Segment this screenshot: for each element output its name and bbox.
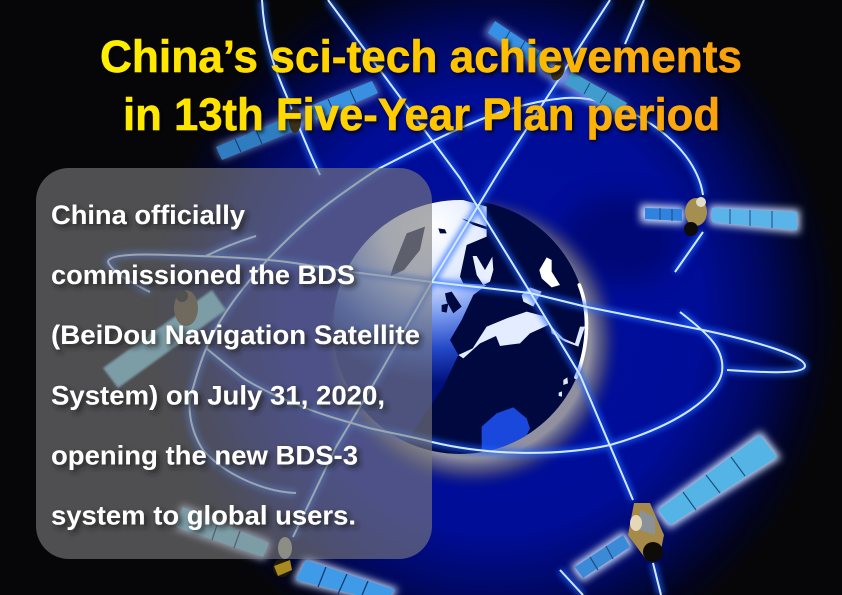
body text <box>51 200 420 530</box>
body line 1: China officially <box>51 200 245 230</box>
satellite body <box>278 537 292 559</box>
body line 3: (BeiDou Navigation Satellite <box>51 320 420 350</box>
satellite body <box>628 503 664 558</box>
satellite: top centre <box>484 20 627 118</box>
globe land and lit ocean <box>333 200 588 452</box>
solar wings glow <box>643 207 797 230</box>
satellite body <box>548 59 568 83</box>
solar wings <box>296 560 395 595</box>
solar wings <box>658 435 777 525</box>
lit ocean <box>333 200 487 442</box>
solar wings <box>488 21 553 72</box>
title line 2: in 13th Five-Year Plan period <box>123 89 720 140</box>
satellite: left, behind panel <box>103 290 226 388</box>
bottom blue sea <box>482 407 530 452</box>
solar wings glow <box>575 435 777 578</box>
greenland shadow <box>390 227 425 277</box>
title <box>100 31 742 140</box>
solar wings glow <box>484 20 627 118</box>
earth globe <box>333 198 616 484</box>
solar wing <box>103 290 226 388</box>
bright rim <box>576 285 586 377</box>
satellite: bottom centre <box>176 507 395 595</box>
solar wings glow <box>176 507 395 595</box>
satellite body <box>289 107 301 133</box>
satellite: right <box>643 197 797 236</box>
solar wings <box>216 118 292 160</box>
central land highlight <box>522 287 542 307</box>
solar wings <box>645 208 682 221</box>
panel: description card <box>36 168 432 559</box>
caspian highlight <box>539 257 560 287</box>
dark islands <box>438 228 462 313</box>
streak near the top <box>462 218 487 229</box>
body line 5: opening the new BDS-3 <box>51 440 358 470</box>
body line 2: commissioned the BDS <box>51 260 355 290</box>
globe body <box>333 200 587 454</box>
satellite: bottom right <box>575 435 777 578</box>
darker sky beside the globe <box>560 195 680 285</box>
mediterranean shore <box>458 312 548 358</box>
globe halo <box>323 191 623 491</box>
title line 1: China’s sci-tech achievements <box>100 31 742 82</box>
body line 6: system to global users. <box>51 500 356 530</box>
satellite body <box>174 290 198 326</box>
satellite: top left <box>215 80 380 160</box>
arabian coast <box>550 325 585 347</box>
white coast on north land <box>473 256 493 285</box>
body line 4: System) on July 31, 2020, <box>51 380 385 410</box>
solar wings glow <box>215 80 380 160</box>
small island <box>563 377 568 385</box>
satellite body <box>685 198 707 226</box>
